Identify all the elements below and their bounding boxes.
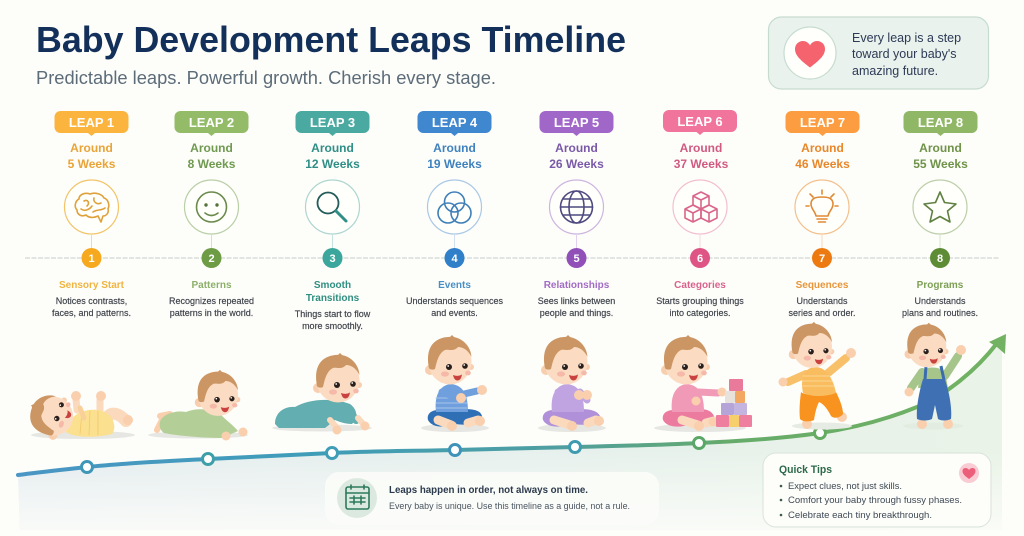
leap 3 age: Around xyxy=(311,141,354,155)
leap 4 column xyxy=(406,111,504,318)
title: Baby Development Leaps Timeline xyxy=(36,19,626,60)
description: Understands sequences xyxy=(406,296,504,306)
callout text: Every leap is a step xyxy=(852,31,961,45)
leap 6 column xyxy=(656,110,744,318)
description: Understands xyxy=(796,296,848,306)
note heading: Leaps happen in order, not always on time. xyxy=(389,485,588,496)
timeline nodes xyxy=(82,428,826,472)
leap 4 badge xyxy=(418,111,492,136)
leap 8 age: Around xyxy=(919,141,962,155)
description: into categories. xyxy=(669,308,731,318)
description: faces, and patterns. xyxy=(52,308,131,318)
tips list: Comfort your baby through fussy phases. xyxy=(788,495,962,506)
label: smooth transitions: Transitions xyxy=(306,293,360,304)
leap 4 age: 19 Weeks xyxy=(427,157,482,171)
icon: heart in circle xyxy=(784,27,836,79)
baby 5: sitting in purple xyxy=(538,335,606,432)
number 3: 3 xyxy=(329,253,336,265)
description: and events. xyxy=(431,308,478,318)
leap 7 badge xyxy=(786,111,860,136)
baby 2: tummy time xyxy=(148,370,248,440)
tips list xyxy=(780,481,962,521)
leap 1 badge xyxy=(54,111,128,136)
leap 5 badge: LEAP 5 xyxy=(554,115,599,130)
description: plans and routines. xyxy=(902,308,978,318)
baby 3: crawling xyxy=(272,353,372,434)
description: Starts grouping things xyxy=(656,296,744,306)
baby 8: standing in overalls xyxy=(903,323,966,430)
number 8: 8 xyxy=(937,253,943,265)
leap 1 age: Around xyxy=(70,141,113,155)
subtitle: Predictable leaps. Powerful growth. Cherish every stage. xyxy=(36,68,496,88)
number 5: 5 xyxy=(573,253,580,265)
leap 8 column xyxy=(902,111,978,318)
number 6: 6 xyxy=(697,253,703,265)
icon: small heart xyxy=(959,463,979,483)
description: Recognizes repeated xyxy=(169,296,254,306)
tips list: Celebrate each tiny breakthrough. xyxy=(788,510,932,521)
description: patterns in the world. xyxy=(170,308,253,318)
number 4: 4 xyxy=(451,253,458,265)
leap 5 column xyxy=(538,111,615,318)
number 1 xyxy=(82,248,102,268)
leap 2 age: 8 Weeks xyxy=(188,157,236,171)
icon: cubes xyxy=(673,180,727,248)
description: more smoothly. xyxy=(302,321,363,331)
description: series and order. xyxy=(788,308,856,318)
leap 7 column xyxy=(786,111,860,318)
description: Sees links between xyxy=(538,296,615,306)
note text: Every baby is unique. Use this timeline as a guide, not a rule. xyxy=(389,501,630,511)
tips list: Expect clues, not just skills. xyxy=(788,481,902,492)
leap 8 badge: LEAP 8 xyxy=(918,115,963,130)
leap 3 badge: LEAP 3 xyxy=(310,115,355,130)
icon: globe xyxy=(550,180,604,248)
label: smooth transitions: Smooth xyxy=(314,280,351,291)
leap 1 column xyxy=(52,111,131,318)
leap 5 badge xyxy=(540,111,614,136)
leap 6 age: 37 Weeks xyxy=(674,157,729,171)
callout: every leap xyxy=(768,17,988,89)
callout text: amazing future. xyxy=(852,64,938,78)
number 6 xyxy=(690,248,710,268)
leap 2 badge: LEAP 2 xyxy=(189,115,234,130)
number 3 xyxy=(322,248,342,268)
number 7 xyxy=(812,248,832,268)
description: Notices contrasts, xyxy=(56,296,127,306)
icon: magnifier xyxy=(306,180,360,248)
leap 1 age: 5 Weeks xyxy=(68,157,116,171)
leap 1 badge: LEAP 1 xyxy=(69,115,114,130)
icon: light bulb xyxy=(795,180,849,248)
leap 4 badge: LEAP 4 xyxy=(432,115,478,130)
growth area under curve xyxy=(18,347,1002,520)
icon: smile xyxy=(184,180,238,248)
label: programs: Programs xyxy=(917,280,964,291)
icon: calendar xyxy=(337,478,377,518)
leap 3 badge xyxy=(296,111,370,136)
description: people and things. xyxy=(540,308,613,318)
note panel xyxy=(325,472,659,525)
leap 4 age: Around xyxy=(433,141,476,155)
number 5 xyxy=(566,248,586,268)
growth curve with arrow xyxy=(18,334,1006,475)
leap 5 age: Around xyxy=(555,141,598,155)
icon: brain xyxy=(64,180,118,248)
baby 4: sitting in blue xyxy=(421,335,489,432)
leap 3 age: 12 Weeks xyxy=(305,157,360,171)
leap 8 age: 55 Weeks xyxy=(913,157,968,171)
number 7: 7 xyxy=(819,253,825,265)
label: sequences: Sequences xyxy=(796,280,849,291)
leap 8 badge xyxy=(904,111,978,136)
leap 2 column xyxy=(169,111,254,318)
dashed timeline xyxy=(25,257,1000,259)
icon: overlapping circles xyxy=(428,180,482,248)
label: relationships: Relationships xyxy=(544,280,610,291)
label: categories: Categories xyxy=(674,280,726,291)
leap 7 badge: LEAP 7 xyxy=(800,115,845,130)
number 8 xyxy=(930,248,950,268)
description: Understands xyxy=(914,296,966,306)
number 2: 2 xyxy=(208,253,215,265)
label: events: Events xyxy=(438,280,471,291)
label: patterns: Patterns xyxy=(191,280,232,291)
quick tips panel xyxy=(763,453,991,527)
leap 5 age: 26 Weeks xyxy=(549,157,604,171)
callout text: toward your baby's xyxy=(852,47,957,61)
leap 7 age: Around xyxy=(801,141,844,155)
quick tips heading: Quick Tips xyxy=(779,464,832,476)
leap 3 column xyxy=(295,111,371,331)
leap 6 badge: LEAP 6 xyxy=(677,114,723,129)
baby 6: sitting with blocks xyxy=(654,335,752,432)
baby 7: first steps xyxy=(778,322,856,430)
leap 2 badge xyxy=(174,111,248,136)
description: Things start to flow xyxy=(295,309,371,319)
leap 7 age: 46 Weeks xyxy=(795,157,850,171)
icon: star xyxy=(913,180,967,248)
toy blocks xyxy=(716,379,752,427)
label: sensory start: Sensory Start xyxy=(59,280,125,291)
number 2 xyxy=(202,248,222,268)
leap 6 age: Around xyxy=(680,141,722,155)
number 1: 1 xyxy=(88,253,95,265)
baby 1: lying on back xyxy=(22,387,135,444)
number 4 xyxy=(444,248,464,268)
leap 6 badge xyxy=(663,110,737,135)
leap 2 age: Around xyxy=(190,141,233,155)
